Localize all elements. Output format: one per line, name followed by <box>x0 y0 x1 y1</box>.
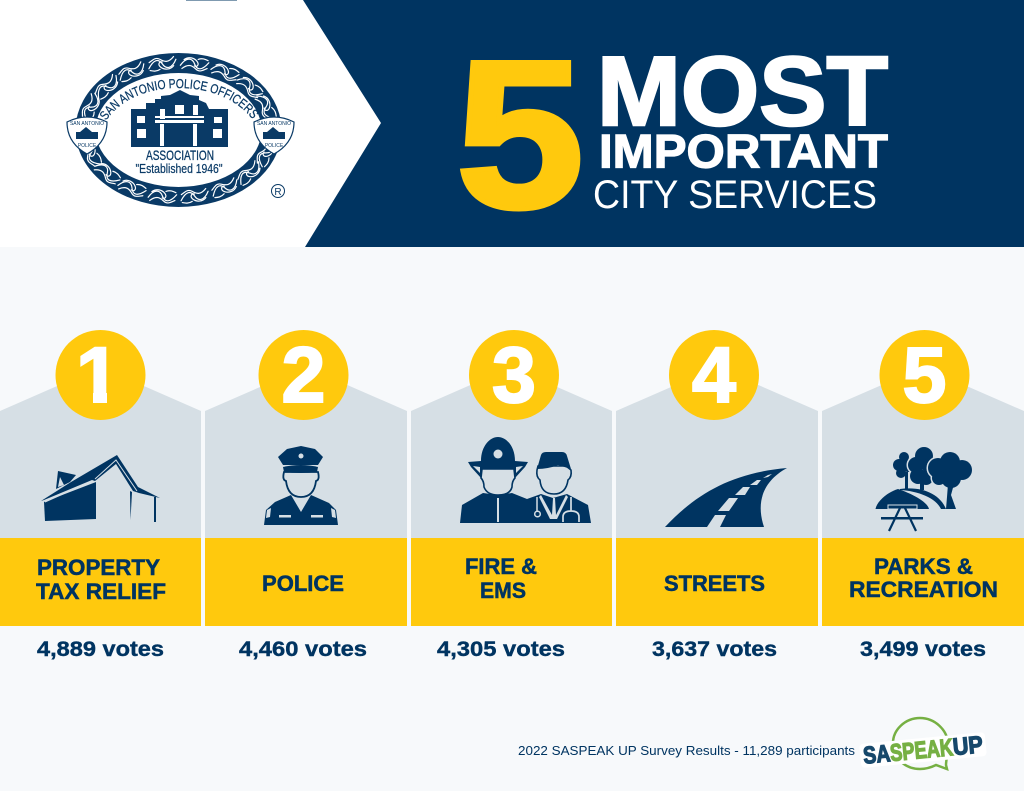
title: IMPORTANT: IMPORTANT <box>599 124 888 178</box>
title: CITY SERVICES: CITY SERVICES <box>593 173 877 217</box>
icon: park with trees and picnic table <box>876 447 972 531</box>
logo: SA Speak Up: SPEAK <box>889 734 955 767</box>
rank badge 1: 1 <box>76 330 120 419</box>
logo: left shield: POLICE <box>78 143 97 149</box>
vote count: 4,305 votes <box>437 638 565 661</box>
rank badge 4: 4 <box>692 330 736 419</box>
icon: road <box>665 468 787 527</box>
rank badge 2: 2 <box>282 330 325 419</box>
panel 4: streets <box>616 330 818 661</box>
label: EMS <box>480 578 526 603</box>
panel 1: property tax relief <box>0 330 201 661</box>
rank badge 5: 5 <box>903 330 946 419</box>
label: RECREATION <box>849 577 998 602</box>
panel 2: police <box>205 330 407 661</box>
label: TAX RELIEF <box>36 579 166 604</box>
vote count: 3,637 votes <box>652 638 777 661</box>
logo: left shield <box>67 117 107 154</box>
logo: right shield: POLICE <box>265 143 284 149</box>
icon: firefighter and doctor <box>460 437 591 523</box>
logo: SA Speak Up: UP <box>952 731 984 761</box>
logo: right shield: SAN ANTONIO <box>257 121 291 127</box>
logo: left shield: SAN ANTONIO <box>70 121 104 127</box>
label <box>849 554 998 602</box>
rank badge 3 <box>469 330 559 420</box>
rank badge 2 <box>258 330 348 420</box>
label <box>36 555 166 604</box>
rank badge 5 <box>880 330 970 420</box>
label: PARKS & <box>874 554 973 579</box>
footer source note: 2022 SASPEAK UP Survey Results - 11,289 participants <box>518 743 856 758</box>
rank badge 4 <box>669 330 759 420</box>
rank badge 3: 3 <box>492 330 536 419</box>
icon: police officer <box>264 446 338 525</box>
logo: right shield <box>254 117 294 154</box>
label: FIRE & <box>465 554 537 579</box>
title: big number 5: 5 <box>456 17 584 252</box>
header band <box>66 0 1024 252</box>
icon: house <box>41 455 160 522</box>
registered mark: R <box>274 187 282 198</box>
vote count: 3,499 votes <box>860 638 986 661</box>
label: PROPERTY <box>37 555 160 580</box>
label <box>465 554 537 603</box>
panel 3: fire and EMS <box>411 330 612 661</box>
logo ring text: SAN ANTONIO POLICE OFFICERS <box>100 78 258 120</box>
vote count: 4,889 votes <box>37 638 164 661</box>
logo: Alamo building <box>131 90 228 147</box>
vote count: 4,460 votes <box>239 638 367 661</box>
label: POLICE <box>262 571 344 596</box>
title: MOST: MOST <box>597 36 888 146</box>
logo: SA Speak Up: SA <box>862 740 891 770</box>
logo: association text: ASSOCIATION <box>146 147 214 163</box>
logo: San Antonio Police Officers Association <box>66 53 295 207</box>
panel 5: parks and recreation <box>822 330 1024 661</box>
logo: SA Speak Up <box>859 718 987 770</box>
registered mark <box>272 184 284 198</box>
label: STREETS <box>664 571 765 596</box>
rank badge 1 <box>56 330 146 420</box>
logo: established text: "Established 1946" <box>136 162 222 176</box>
